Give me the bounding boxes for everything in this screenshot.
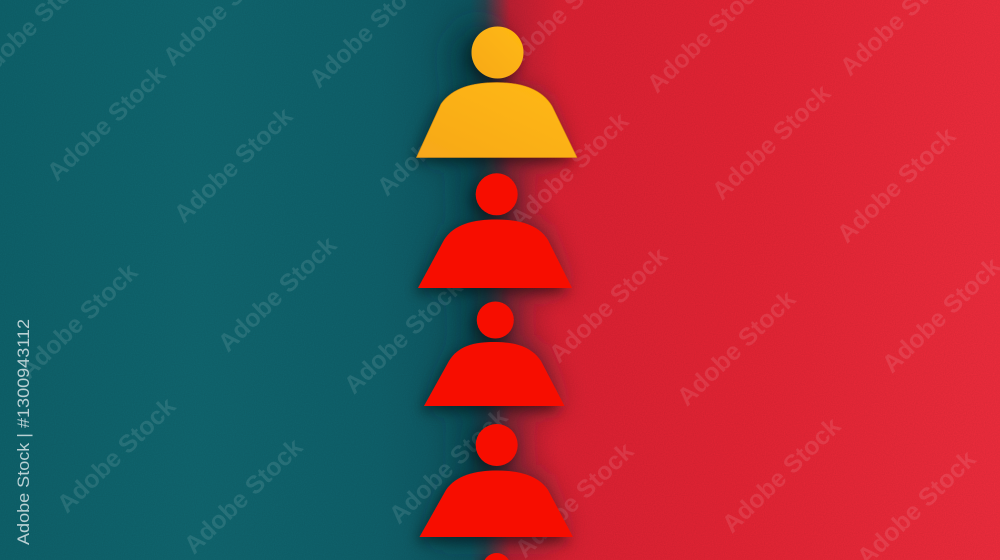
figure: red person 1 bbox=[418, 173, 572, 288]
watermark pattern: Adobe Stock bbox=[14, 258, 143, 384]
watermark pattern: Adobe Stock bbox=[372, 75, 501, 201]
soft shadow column behind figures bbox=[425, 22, 565, 540]
figure: red person 3 bbox=[420, 424, 573, 537]
watermark pattern: Adobe Stock bbox=[510, 437, 639, 560]
figure: yellow person bbox=[416, 26, 577, 158]
watermark pattern: Adobe Stock bbox=[169, 102, 298, 228]
watermark pattern: Adobe Stock bbox=[707, 79, 836, 205]
watermark pattern: Adobe Stock bbox=[505, 107, 634, 233]
figure: red person 2 bbox=[424, 302, 564, 406]
watermark pattern: Adobe Stock bbox=[832, 122, 961, 248]
watermark pattern: Adobe Stock bbox=[179, 433, 308, 559]
watermark pattern: Adobe Stock bbox=[42, 60, 171, 186]
watermark pattern: Adobe Stock bbox=[717, 412, 846, 538]
watermark pattern: Adobe Stock bbox=[52, 392, 181, 518]
watermark pattern: Adobe Stock bbox=[544, 242, 673, 368]
watermark pattern: Adobe Stock bbox=[384, 403, 513, 529]
watermark pattern: Adobe Stock bbox=[213, 231, 342, 357]
watermark pattern: Adobe Stock bbox=[339, 273, 468, 399]
watermark pattern: Adobe Stock bbox=[672, 285, 801, 411]
figure: red person 4 partial bbox=[483, 553, 511, 560]
stock id label: Adobe Stock | #1300943112 bbox=[14, 319, 33, 545]
